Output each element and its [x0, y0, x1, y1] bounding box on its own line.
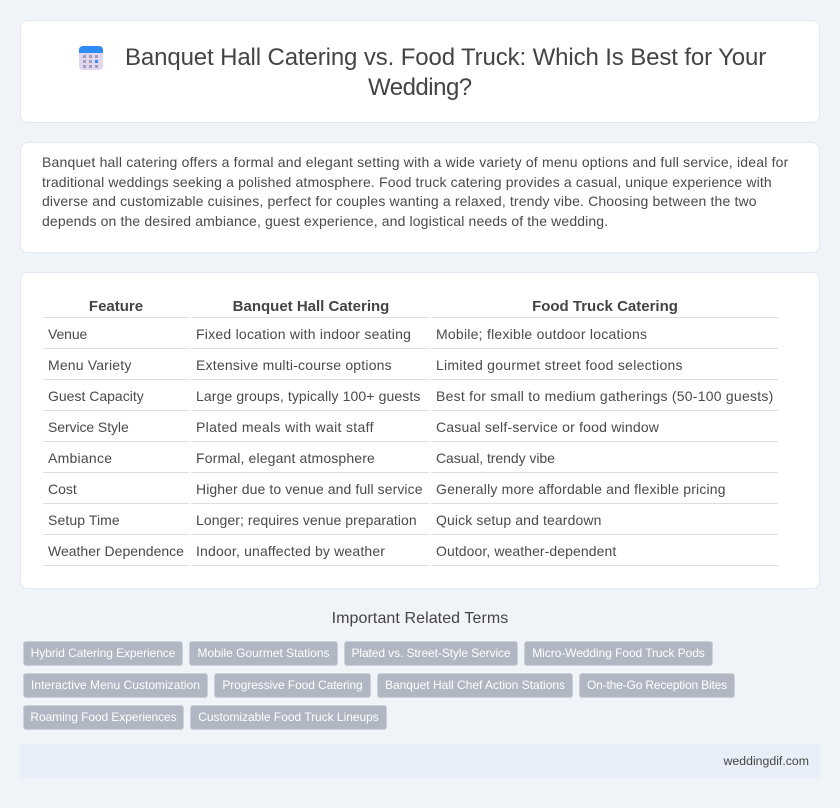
row: weather dependence: Weather Dependence [48, 543, 184, 559]
panel: intro text [20, 142, 820, 253]
title: Wedding? [368, 74, 472, 101]
row: guest capacity [48, 388, 774, 404]
icon: calendar [79, 46, 103, 70]
row: guest capacity: Large groups, typically 100+ guests [196, 388, 420, 404]
panel: header [20, 20, 820, 123]
tag [214, 673, 371, 698]
row: venue: Fixed location with indoor seating [196, 326, 411, 342]
row: weather dependence [48, 543, 616, 559]
row: setup time: Quick setup and teardown [436, 512, 602, 528]
table header: banquet hall catering: Banquet Hall Catering [233, 298, 389, 315]
tag: On-the-Go Reception Bites [587, 678, 727, 692]
tag: Customizable Food Truck Lineups [198, 710, 379, 724]
tag: Plated vs. Street-Style Service [352, 646, 510, 660]
tag [23, 673, 208, 698]
panel: comparison table [20, 272, 820, 589]
row: service style: Plated meals with wait staff [196, 419, 374, 435]
row: menu variety [48, 357, 683, 373]
row: menu variety: Extensive multi-course options [196, 357, 392, 373]
footer: site name: weddingdif.com [724, 754, 809, 768]
row: guest capacity: Best for small to medium gatherings (50-100 guests) [436, 388, 774, 404]
row: setup time: Longer; requires venue preparation [196, 512, 417, 528]
row: setup time: Setup Time [48, 512, 120, 528]
tag: Progressive Food Catering [222, 678, 363, 692]
text block: intro [42, 154, 788, 229]
tag [23, 641, 183, 666]
tag [190, 705, 387, 730]
title: Banquet Hall Catering vs. Food Truck: Which Is Best for Your [125, 44, 766, 71]
tag [23, 705, 184, 730]
row: venue: Mobile; flexible outdoor locations [436, 326, 647, 342]
tag: Hybrid Catering Experience [31, 646, 175, 660]
row: guest capacity: Guest Capacity [48, 388, 144, 404]
text block: intro: Banquet hall catering offers a formal and elegant setting with a wide variety of menu options and full service, ideal for [42, 154, 788, 170]
tag: Interactive Menu Customization [31, 678, 200, 692]
table header: food truck catering: Food Truck Catering [532, 298, 678, 315]
row: venue [48, 326, 647, 342]
text block: intro: depends on the desired ambiance, guest experience, and logistical needs of the wedding. [42, 212, 608, 228]
row: setup time [48, 512, 602, 528]
row: menu variety: Limited gourmet street food selections [436, 357, 683, 373]
row: cost: Generally more affordable and flexible pricing [436, 481, 726, 497]
row: ambiance [48, 450, 555, 466]
tag: Banquet Hall Chef Action Stations [385, 678, 565, 692]
tag [579, 673, 735, 698]
row: venue: Venue [48, 326, 87, 342]
row: cost: Cost [48, 481, 77, 497]
tag: Roaming Food Experiences [30, 710, 177, 724]
row: weather dependence: Indoor, unaffected by weather [196, 543, 385, 559]
tag [524, 641, 713, 666]
tag [189, 641, 338, 666]
heading: important related terms: Important Related Terms [332, 610, 508, 627]
row: cost: Higher due to venue and full service [196, 481, 423, 497]
row: ambiance: Formal, elegant atmosphere [196, 450, 375, 466]
row: service style: Casual self-service or food window [436, 419, 659, 435]
row: service style: Service Style [48, 419, 129, 435]
row: service style [48, 419, 659, 435]
tag [377, 673, 573, 698]
footer [20, 744, 820, 778]
tag [344, 641, 518, 666]
title [125, 44, 766, 101]
text block: intro: traditional weddings seeking a polished atmosphere. Food truck catering provides a casual, unique experience with [42, 174, 772, 190]
tag: Micro-Wedding Food Truck Pods [532, 646, 705, 660]
tag: Mobile Gourmet Stations [197, 646, 330, 660]
row: menu variety: Menu Variety [48, 357, 131, 373]
tag group: related terms [23, 641, 735, 730]
table header: feature: Feature [89, 298, 143, 315]
row: ambiance: Ambiance [48, 450, 112, 466]
text block: intro: diverse and customizable cuisines, perfect for couples wanting a relaxed, trendy vibe. Choosing between the two [42, 193, 757, 209]
row: ambiance: Casual, trendy vibe [436, 450, 555, 466]
row: cost [48, 481, 726, 497]
row: weather dependence: Outdoor, weather-dependent [436, 543, 616, 559]
